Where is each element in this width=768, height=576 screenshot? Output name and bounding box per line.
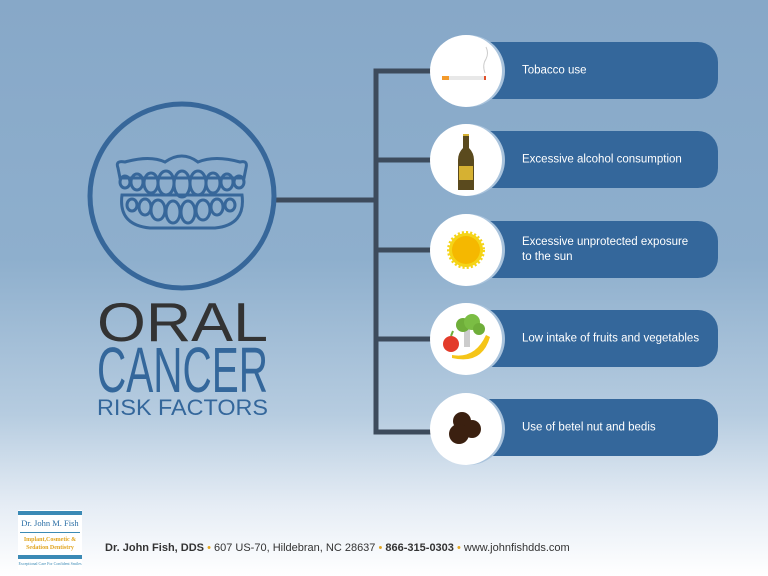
factor 2: alcohol (470, 131, 718, 188)
icon: fruits and vegetables (430, 303, 502, 375)
factor 3: sun: Excessive unprotected exposure (522, 236, 688, 248)
factor 4: fruits (470, 310, 718, 367)
footer contact text: Dr. John Fish, DDS • 607 US-70, Hildebran, NC 28637 • 866-315-0303 • www.johnfishdds.com (105, 542, 570, 554)
icon: sun (430, 214, 502, 286)
factor 3: sun: to the sun (522, 250, 573, 262)
title (97, 295, 268, 420)
footer logo: Sedation Dentistry (26, 545, 74, 551)
footer logo: Implant,Cosmetic & (24, 537, 76, 543)
icon: cigarette (430, 35, 502, 107)
footer logo: Dr. John M. Fish (21, 518, 79, 528)
factor 5: betel nut (470, 399, 718, 456)
factor 1: tobacco (470, 42, 718, 99)
factor 1: tobacco: Tobacco use (522, 64, 587, 76)
footer logo: Exceptional Care For Confident Smiles (18, 561, 82, 566)
title: RISK FACTORS (97, 395, 268, 420)
factor 2: alcohol: Excessive alcohol consumption (522, 153, 682, 165)
icon: teeth circle (88, 102, 276, 290)
footer logo (18, 510, 82, 570)
factor 5: betel nut: Use of betel nut and bedis (522, 421, 656, 433)
factor 3: sun (470, 221, 718, 278)
icon: betel nuts (430, 393, 502, 465)
icon: bottle (430, 124, 502, 196)
factor 4: fruits: Low intake of fruits and vegetables (522, 332, 699, 344)
